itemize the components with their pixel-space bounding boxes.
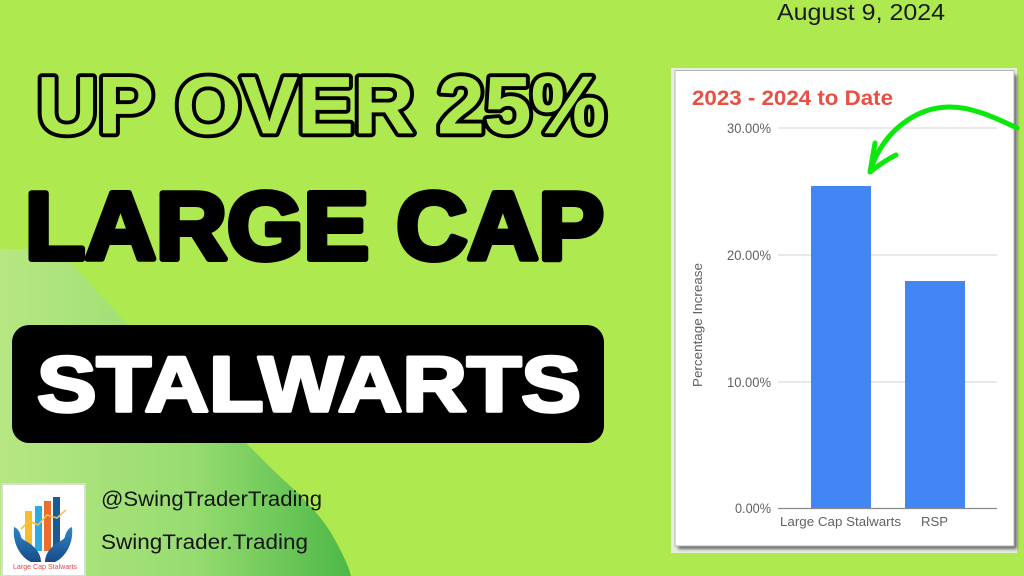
social handle: @SwingTraderTrading [101,487,322,511]
y axis title: Percentage Increase [691,263,705,387]
panel: chart [671,68,1017,553]
banner: stalwarts: STALWARTS [37,340,581,428]
y axis labels [727,121,771,516]
website: SwingTrader.Trading [101,530,308,554]
logo caption: Large Cap Stalwarts [13,562,77,571]
arrow: green pointer [870,107,1017,172]
x axis labels: RSP [921,514,948,529]
banner: stalwarts [12,325,604,443]
logo bars [25,497,60,551]
gradient corner shape [0,249,351,576]
chart title: 2023 - 2024 to Date [692,87,893,110]
x axis labels: Large Cap Stalwarts [780,514,902,529]
heading: large cap: LARGE CAP [25,173,604,280]
baseline [778,508,997,510]
y axis labels: 0.00% [735,501,771,516]
heading: up over 25%: UP OVER 25% [37,61,606,151]
y axis labels: 10.00% [727,375,771,390]
logo trend line [21,510,66,529]
y axis labels: 20.00% [727,248,771,263]
logo [1,483,86,576]
y axis labels: 30.00% [727,121,771,136]
heading: up over 25%: UP OVER 25% [37,61,606,151]
bar: large cap stalwarts [811,186,871,508]
logo hands [14,527,72,562]
grid lines [778,128,997,382]
bar: RSP [905,281,965,508]
